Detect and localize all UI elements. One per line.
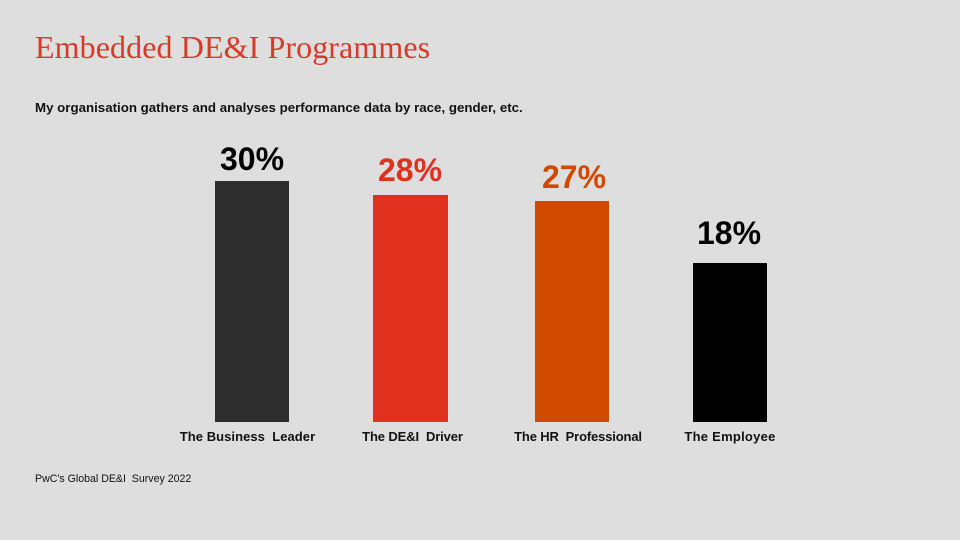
- subtitle: My organisation gathers and analyses performance data by race, gender, etc.: [35, 100, 523, 115]
- value: Business Leader: 30%: [220, 141, 284, 177]
- label: DE&I Driver: The DE&I Driver: [362, 429, 463, 444]
- source note: PwC's Global DE&I Survey 2022: [35, 473, 191, 485]
- bar: DE&I Driver: [373, 195, 448, 422]
- title: Embedded DE&I Programmes: [35, 29, 430, 65]
- label: HR Professional: The HR Professional: [514, 429, 642, 444]
- bar: Business Leader: [215, 181, 289, 422]
- bar chart: [180, 141, 776, 444]
- value: HR Professional: 27%: [542, 159, 606, 195]
- bar: Employee: [693, 263, 767, 422]
- value: DE&I Driver: 28%: [378, 152, 442, 188]
- label: Employee: The Employee: [684, 429, 776, 444]
- label: Business Leader: The Business Leader: [180, 429, 315, 444]
- bar: HR Professional: [535, 201, 609, 422]
- value: Employee: 18%: [697, 215, 761, 251]
